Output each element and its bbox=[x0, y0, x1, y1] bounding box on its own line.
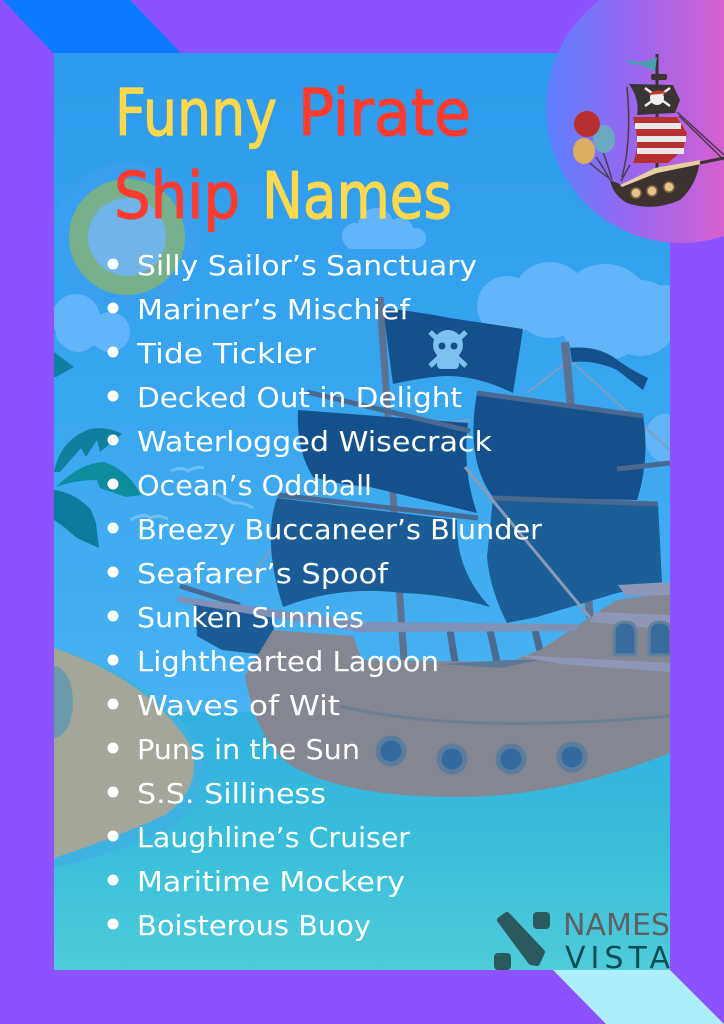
clouds bbox=[52, 208, 685, 462]
pennant bbox=[570, 348, 648, 390]
list of ship names: Waterlogged Wisecrack bbox=[137, 425, 493, 458]
list of ship names: Decked Out in Delight bbox=[137, 381, 462, 414]
title bbox=[114, 77, 471, 234]
list of ship names: Ocean’s Oddball bbox=[137, 469, 372, 502]
logo: Names Vista: VISTA bbox=[565, 941, 670, 976]
list of ship names: S.S. Silliness bbox=[137, 777, 326, 810]
balloons bbox=[573, 111, 615, 164]
list of ship names: Sunken Sunnies bbox=[137, 601, 364, 634]
hull bbox=[178, 582, 671, 797]
sails bbox=[180, 392, 670, 656]
ship rigging bbox=[590, 87, 724, 181]
icon: pirate ship with balloons bbox=[573, 54, 724, 207]
water bbox=[54, 712, 670, 970]
skull flag bbox=[383, 308, 523, 393]
striped sail bbox=[633, 117, 687, 163]
title: Funny bbox=[115, 77, 277, 151]
logo: Names Vista: NAMES bbox=[563, 908, 670, 943]
bottom-right pale cyan corner band bbox=[553, 970, 724, 1024]
ship windows bbox=[614, 622, 671, 655]
sun bbox=[69, 179, 185, 295]
mast bbox=[656, 54, 658, 170]
portholes bbox=[378, 738, 585, 772]
list of ship names: Seafarer’s Spoof bbox=[137, 557, 389, 590]
list of ship names: Puns in the Sun bbox=[137, 733, 360, 766]
list of ship names: Breezy Buccaneer’s Blunder bbox=[137, 513, 542, 546]
logo: Names Vista bbox=[494, 908, 670, 976]
palm leaves bbox=[54, 352, 141, 548]
list of ship names: Waves of Wit bbox=[137, 689, 340, 722]
title: Pirate bbox=[298, 77, 471, 151]
list of ship names: Mariner’s Mischief bbox=[137, 293, 411, 326]
seagulls bbox=[130, 467, 253, 520]
list of ship names: Silly Sailor’s Sanctuary bbox=[137, 249, 477, 282]
ship masts and rigging bbox=[240, 297, 670, 662]
hull bbox=[610, 160, 700, 207]
list of ship names bbox=[108, 249, 542, 942]
top-left blue corner band bbox=[3, 0, 181, 53]
list of ship names: Tide Tickler bbox=[136, 337, 317, 370]
list of ship names: Boisterous Buoy bbox=[137, 909, 371, 942]
black sail bbox=[629, 84, 680, 115]
title: Ship bbox=[114, 160, 240, 234]
list of ship names: Laughline’s Cruiser bbox=[137, 821, 410, 854]
list of ship names: Maritime Mockery bbox=[137, 865, 405, 898]
sand island bbox=[54, 648, 204, 868]
list of ship names: Lighthearted Lagoon bbox=[137, 645, 439, 678]
icon: skull and crossbones bbox=[430, 330, 466, 369]
pennant flag bbox=[627, 57, 657, 72]
gradient disc bbox=[546, 0, 724, 243]
skull emblem bbox=[645, 88, 670, 106]
title: Names bbox=[262, 160, 452, 234]
